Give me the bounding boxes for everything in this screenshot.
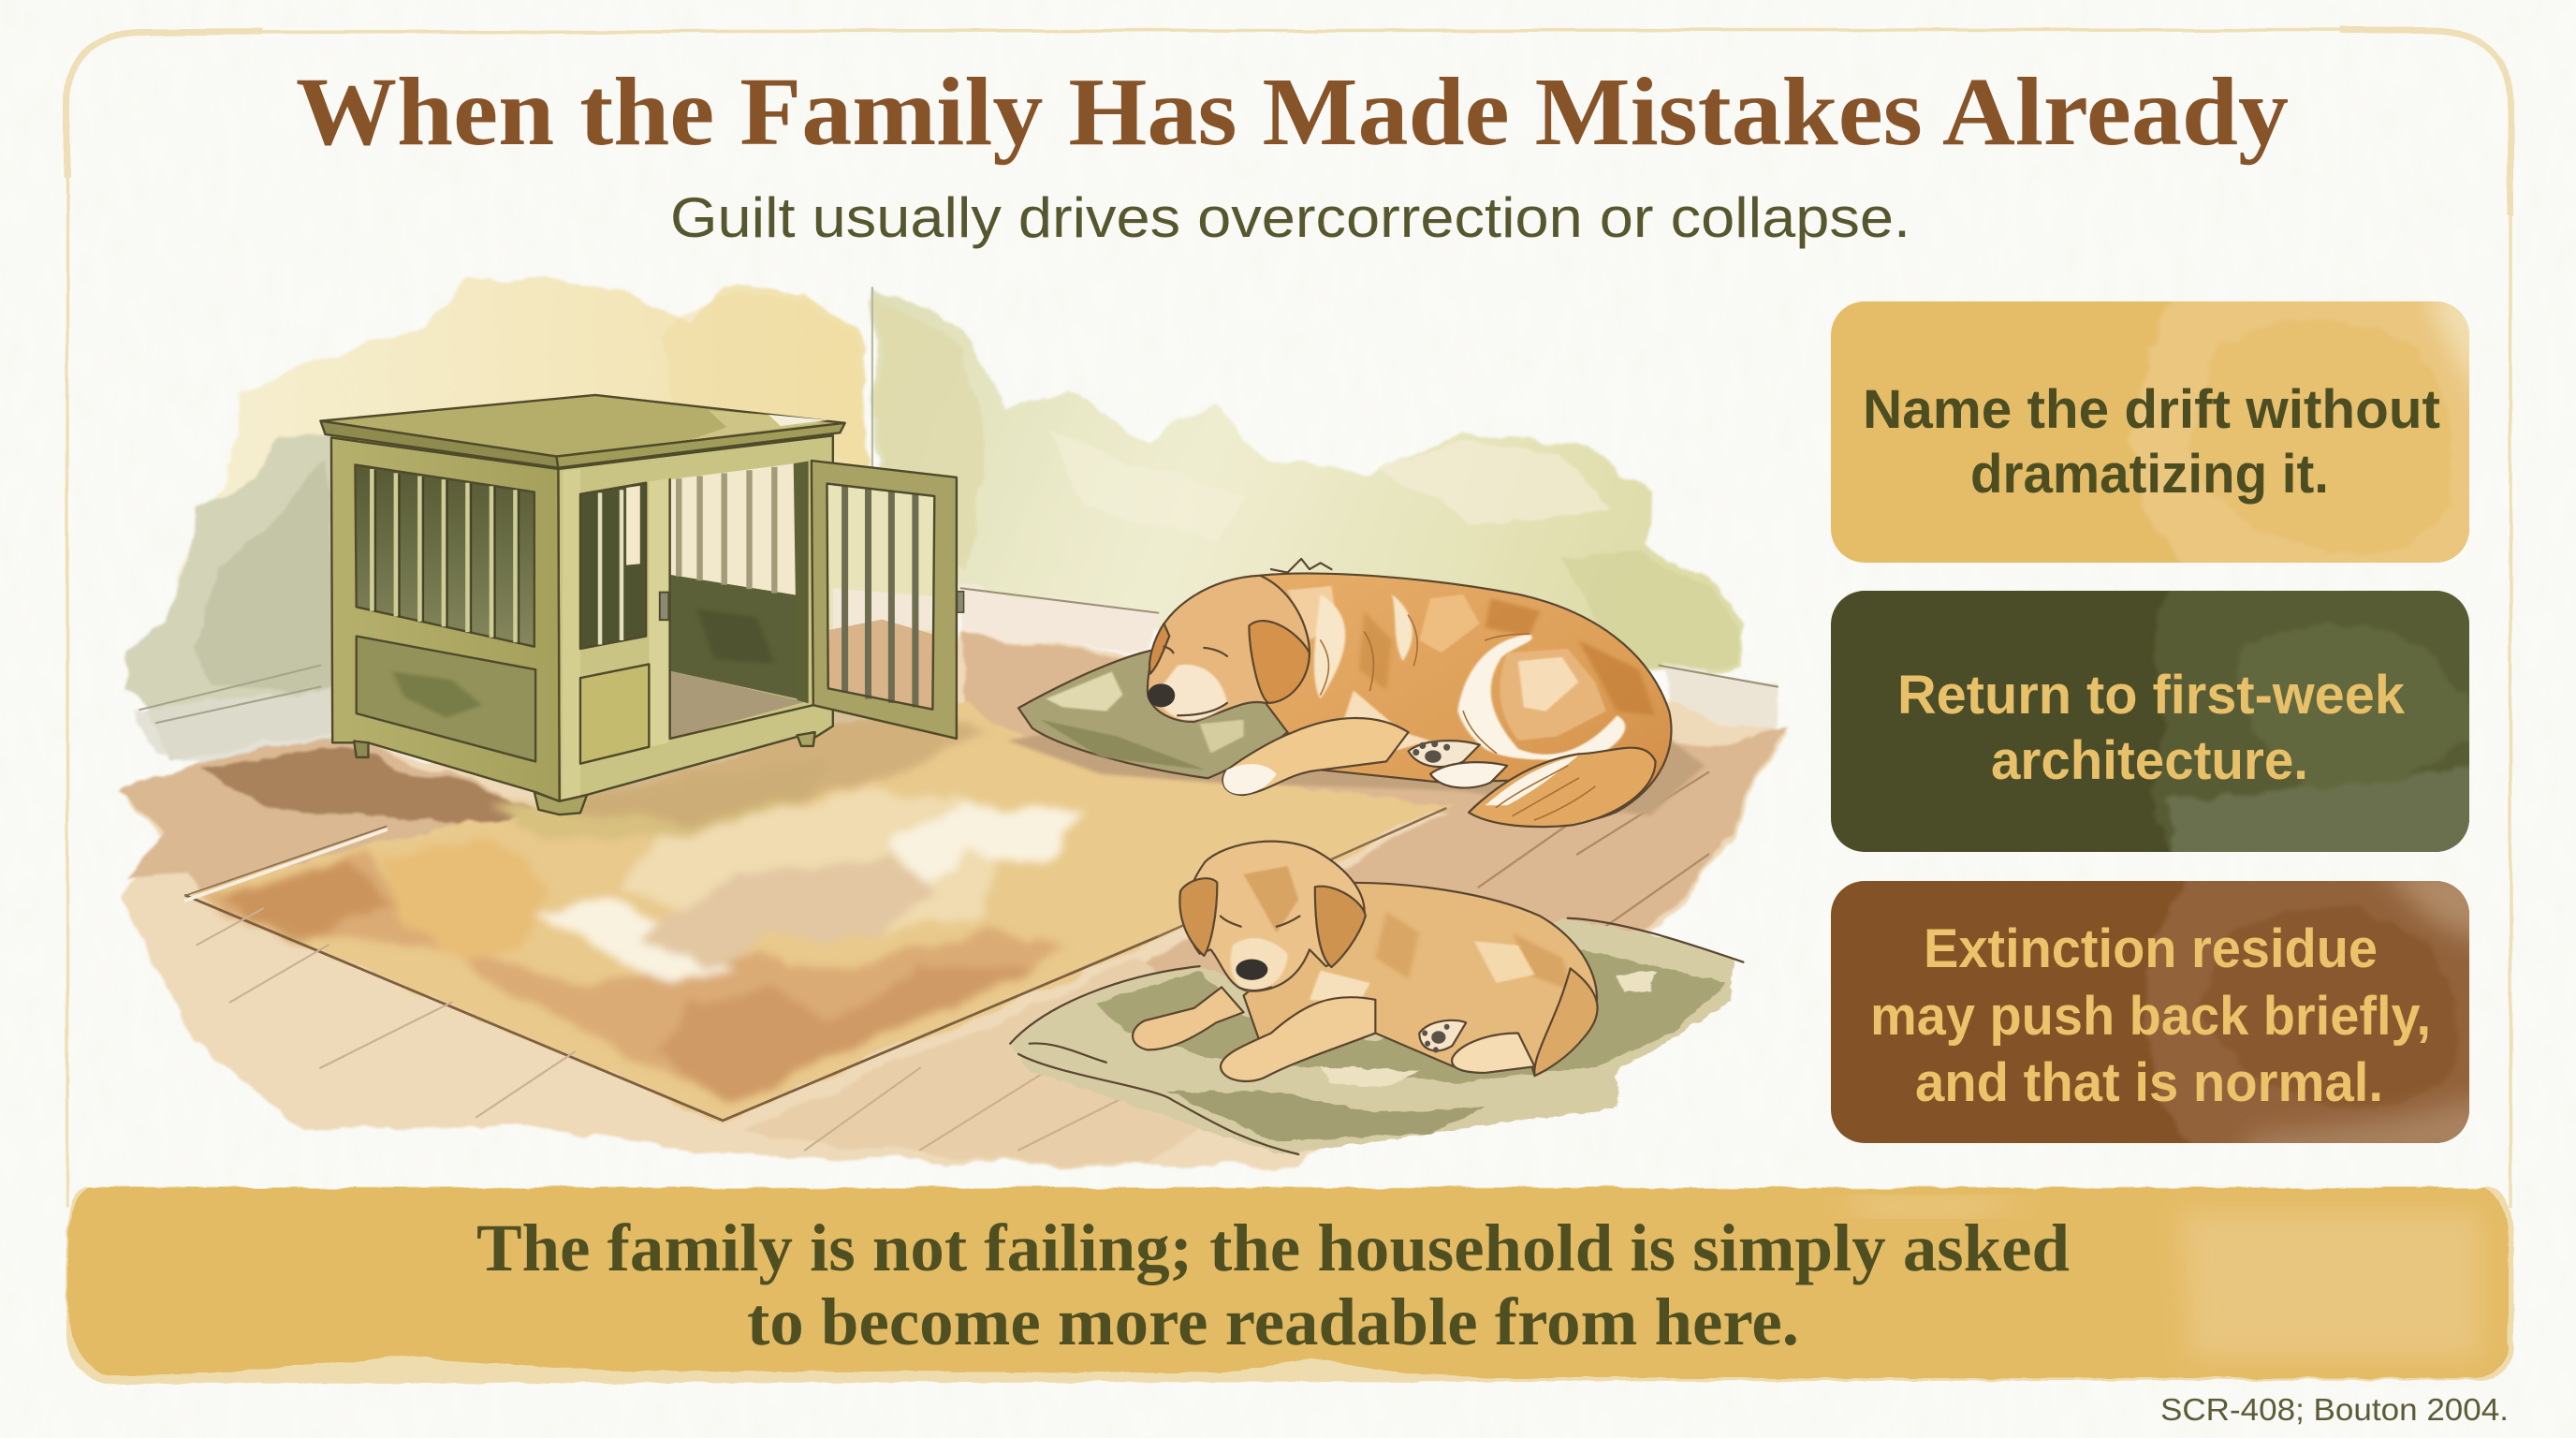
puppy head — [1179, 842, 1366, 991]
banner text: to become more readable from here. — [747, 1284, 1799, 1359]
door latch — [660, 593, 668, 620]
floor plank lines and rug edge — [139, 287, 1778, 1150]
tail — [1469, 748, 1656, 827]
card: return to architecture — [1831, 591, 2469, 852]
puppy hind paws — [1419, 1020, 1535, 1073]
card text: and that is normal. — [1915, 1052, 2383, 1113]
adult golden retriever on pillow — [1007, 559, 1705, 827]
card: extinction residue — [1831, 881, 2469, 1143]
front window — [580, 483, 646, 649]
puppy tail — [1534, 968, 1598, 1076]
wooden crate with open door — [320, 395, 964, 814]
blanket under puppy — [1010, 918, 1743, 1154]
puppy — [1133, 842, 1598, 1081]
floor base — [118, 633, 1787, 1167]
banner text — [476, 1211, 2070, 1359]
rug base — [185, 707, 1445, 1121]
coat highlights — [1287, 586, 1656, 760]
crate feet — [354, 732, 815, 814]
card text: Extinction residue — [1924, 918, 2378, 979]
card text: may push back briefly, — [1870, 986, 2431, 1047]
card text — [1863, 379, 2440, 505]
crate top — [320, 395, 845, 457]
source citation: SCR-408; Bouton 2004. — [2160, 1392, 2509, 1427]
body — [1260, 574, 1671, 825]
pillow — [1007, 650, 1705, 815]
watercolor room washes — [118, 276, 1787, 1167]
front leg — [1222, 718, 1409, 795]
card text: Return to first-week — [1897, 665, 2406, 726]
open crate door — [812, 461, 964, 739]
title: When the Family Has Made Mistakes Already — [296, 58, 2289, 166]
front lower panel — [580, 664, 649, 764]
crate left face — [331, 437, 560, 801]
illustration: crate and two sleeping dogs — [118, 276, 1787, 1167]
banner text: The family is not failing; the household is simply asked — [476, 1211, 2070, 1285]
card text: Name the drift without — [1863, 379, 2440, 440]
hind paw — [1409, 741, 1507, 788]
rug watercolor mottling — [200, 690, 1084, 1104]
crate right face — [558, 435, 833, 801]
card: name the drift — [1831, 301, 2469, 563]
crate interior — [670, 461, 813, 739]
puppy front legs — [1133, 987, 1375, 1081]
side window with bars — [355, 465, 534, 647]
decorative hand-painted frame — [67, 30, 2510, 1208]
subtitle: Guilt usually drives overcorrection or collapse. — [670, 186, 1910, 249]
puppy body — [1244, 883, 1597, 1076]
bottom takeaway banner — [66, 1187, 2514, 1384]
card text — [1870, 918, 2431, 1113]
card text: architecture. — [1991, 730, 2308, 791]
head — [1148, 576, 1310, 722]
card text: dramatizing it. — [1970, 444, 2329, 505]
card text — [1897, 665, 2406, 791]
side lower panel — [357, 637, 535, 761]
